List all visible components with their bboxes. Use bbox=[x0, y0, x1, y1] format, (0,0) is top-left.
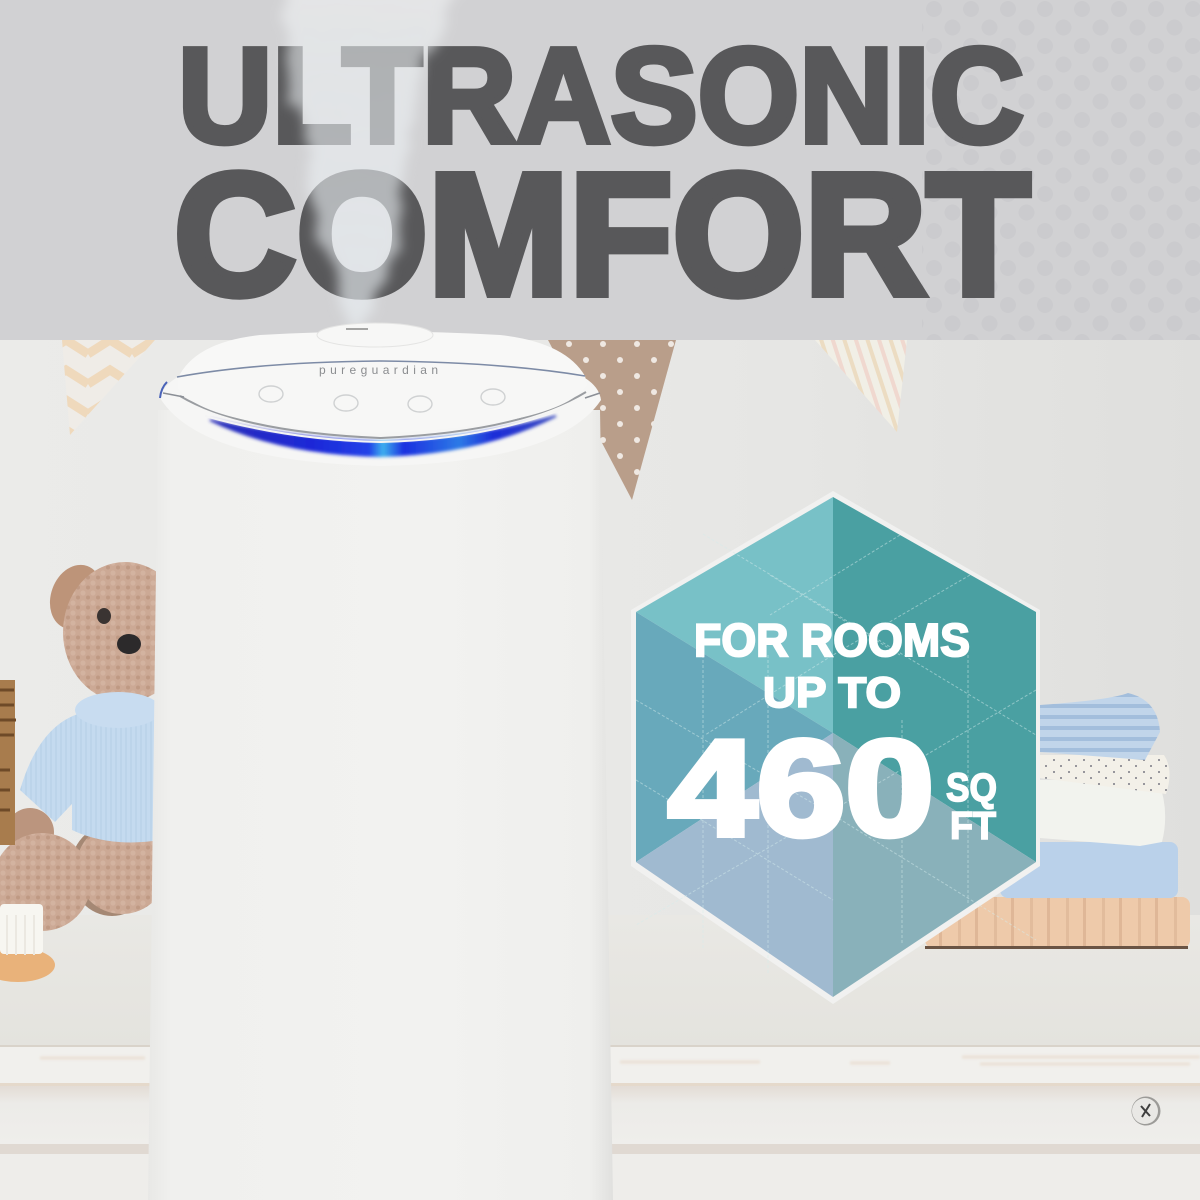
badge grid lines bbox=[636, 534, 1036, 975]
badge face: bottom left bbox=[636, 733, 833, 997]
header band bbox=[0, 0, 1200, 340]
badge border bbox=[631, 491, 1040, 1004]
badge: room coverage bbox=[631, 491, 1040, 1004]
tabletop bbox=[0, 915, 1200, 1047]
badge text bbox=[668, 614, 997, 864]
blue light ring bbox=[210, 416, 556, 456]
background wall bbox=[0, 340, 1200, 920]
glass rim bbox=[180, 392, 586, 438]
brand: pureguardian bbox=[319, 363, 438, 377]
badge face: top left bbox=[636, 497, 833, 733]
badge text: 460 bbox=[668, 712, 934, 864]
bunting flag left bbox=[62, 340, 155, 435]
badge face: top right bbox=[833, 497, 1036, 862]
badge face: left bbox=[636, 612, 833, 862]
title: ULTRASONIC bbox=[178, 20, 1024, 171]
bunting flag center bbox=[548, 340, 676, 500]
lid disc bbox=[178, 361, 587, 433]
dresser front bbox=[0, 1045, 1200, 1200]
humidifier bbox=[148, 323, 613, 1200]
folded linen stack bbox=[925, 693, 1190, 949]
badge face: bottom right bbox=[833, 733, 1036, 997]
teddy bear bbox=[0, 557, 187, 931]
humidifier body bbox=[148, 410, 613, 1200]
badge text: SQ bbox=[946, 766, 997, 810]
mist nozzle bbox=[317, 323, 433, 347]
collar blue edge bbox=[160, 382, 167, 398]
white rim line bbox=[205, 410, 560, 442]
steam plume bbox=[286, 0, 456, 332]
humidifier collar bbox=[160, 368, 601, 466]
wooden brush bbox=[0, 904, 55, 982]
icon: screw bbox=[1132, 1096, 1160, 1126]
lid side tabs bbox=[163, 393, 600, 398]
title bbox=[174, 20, 1030, 331]
title: COMFORT bbox=[174, 137, 1030, 331]
badge text: UP TO bbox=[763, 669, 901, 717]
control buttons bbox=[259, 386, 505, 412]
badge text: FOR ROOMS bbox=[694, 614, 970, 666]
wicker basket bbox=[0, 680, 16, 845]
lid seam bbox=[177, 361, 585, 377]
bunting flag right bbox=[815, 340, 907, 432]
badge text: FT bbox=[950, 805, 996, 848]
lid dome bbox=[178, 332, 585, 378]
